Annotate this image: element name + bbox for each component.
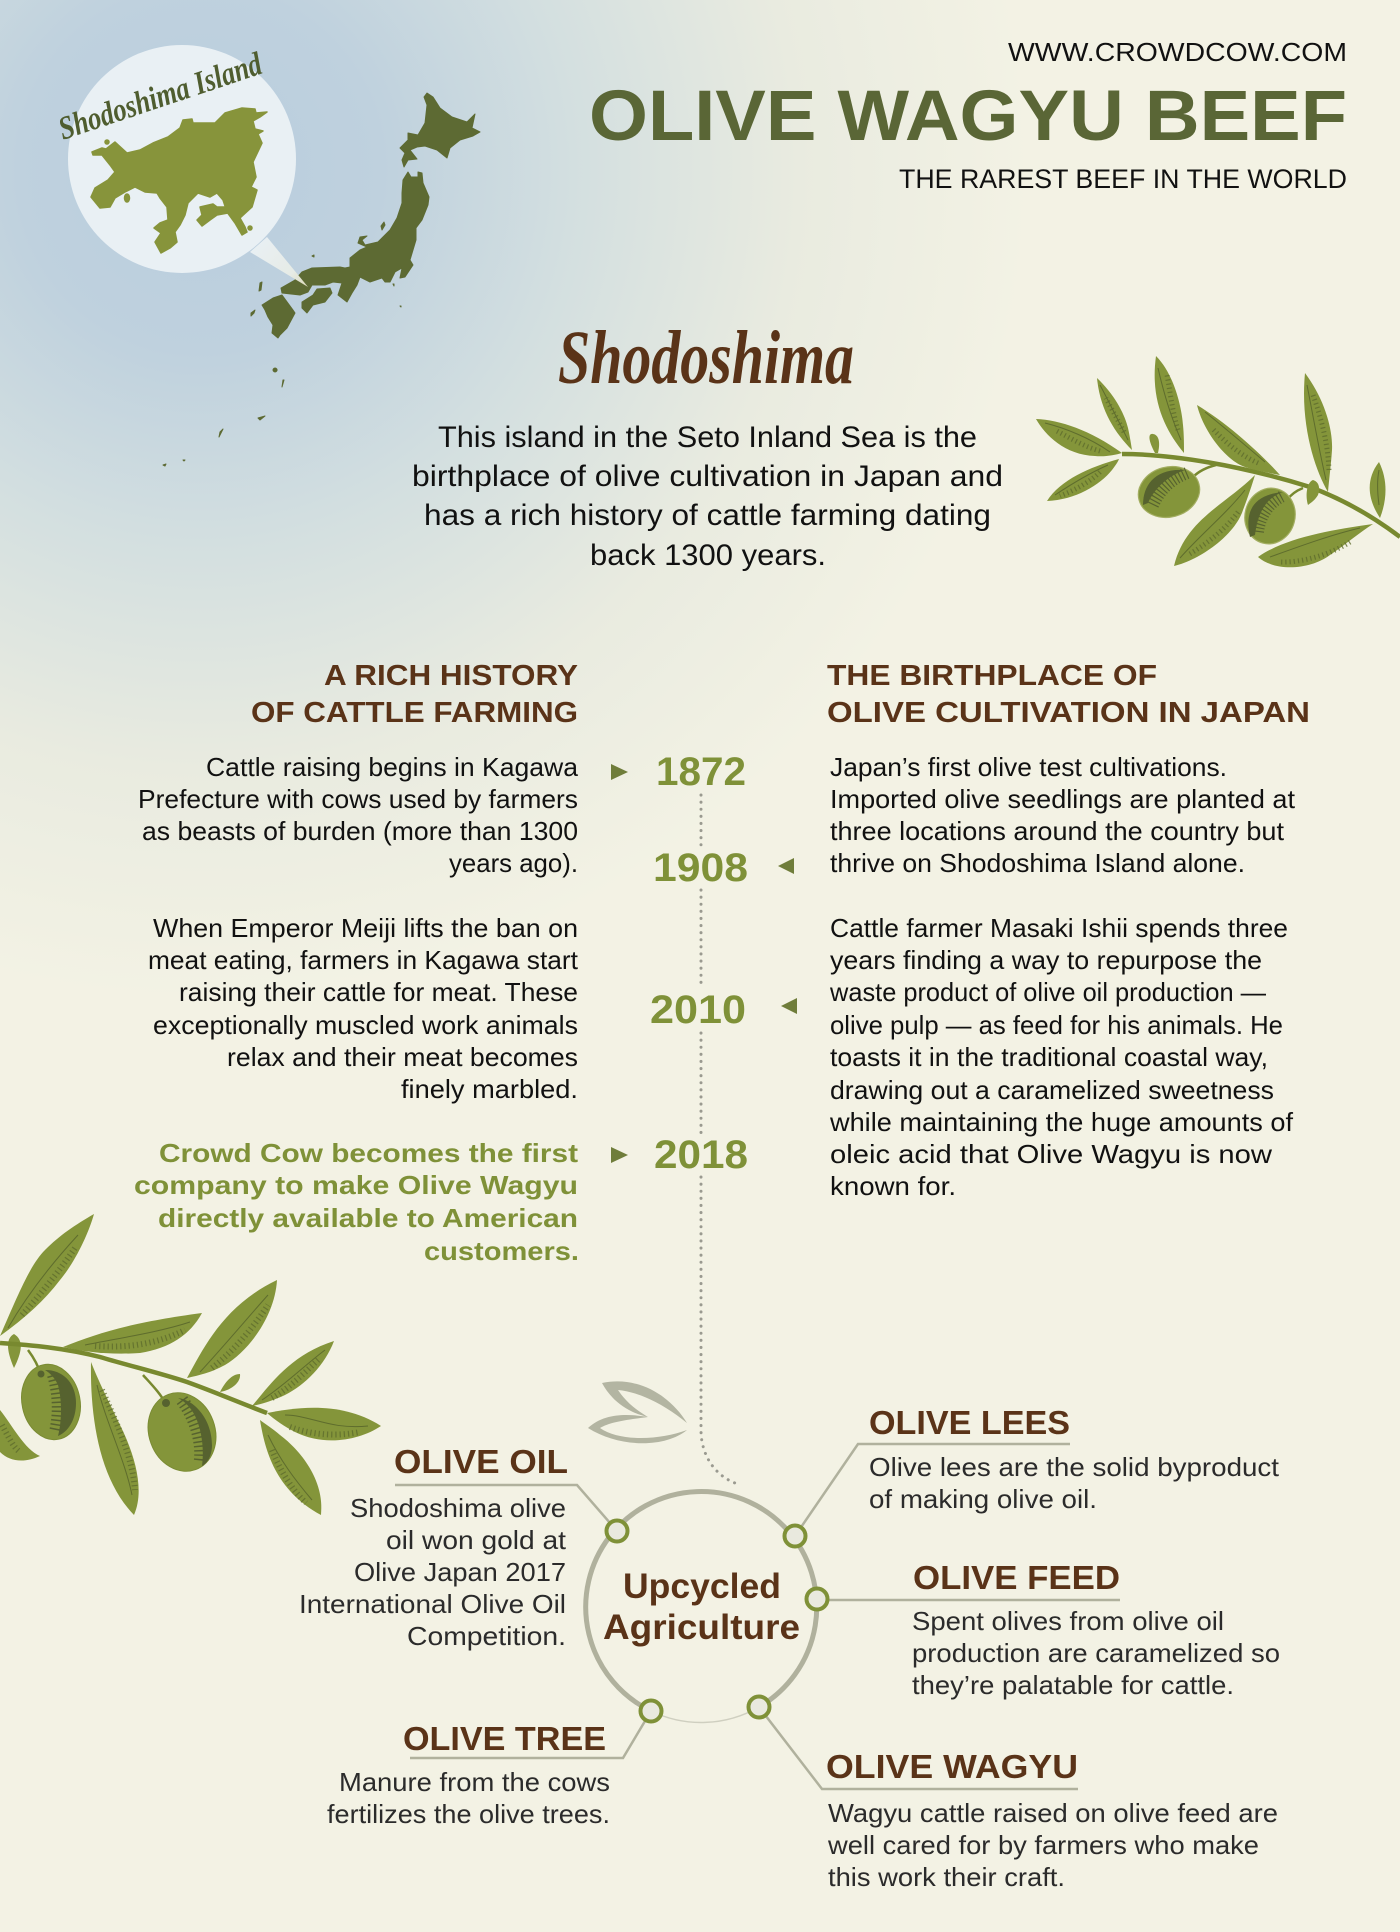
right text: Masaki Ishii: waste product of olive oil production — [829, 977, 1266, 1007]
centre label: Agriculture [603, 1608, 800, 1647]
right text: Masaki Ishii: drawing out a caramelized sweetness [830, 1075, 1274, 1105]
description: Olive Japan 2017 [354, 1557, 566, 1587]
year: 2018: 2018 [654, 1133, 748, 1177]
Kyushu [262, 295, 295, 338]
description: production are caramelized so [912, 1638, 1280, 1668]
left text: Emperor Meiji [148, 913, 579, 1104]
right text: Masaki Ishii: Cattle farmer Masaki Ishii spends three [830, 913, 1288, 943]
item: olive feed: OLIVE FEED [913, 1559, 1120, 1596]
item: olive lees [869, 1404, 1280, 1514]
subtitle: THE RAREST BEEF IN THE WORLD [899, 164, 1347, 194]
stalks [28, 1350, 166, 1404]
label: Shodoshima Island: Shodoshima Island [54, 46, 267, 148]
leaves [1036, 356, 1386, 567]
callout tail [250, 237, 308, 287]
arrow: 2018 [611, 1147, 628, 1163]
column heading: olive cultivation: THE BIRTHPLACE OF [827, 660, 1157, 692]
stem [1122, 454, 1400, 537]
olive [1239, 482, 1301, 550]
year: 2010: 2010 [650, 988, 746, 1032]
column heading: olive cultivation: OLIVE CULTIVATION IN JAPAN [827, 697, 1310, 729]
description: oil won gold at [386, 1525, 567, 1555]
map of Japan [163, 93, 480, 466]
right text: Masaki Ishii: toasts it in the traditional coastal way, [830, 1042, 1268, 1072]
stalks [1193, 465, 1303, 500]
description: Wagyu cattle raised on olive feed are [828, 1798, 1278, 1828]
year: 1872: 1872 [656, 750, 746, 794]
column heading: olive cultivation [827, 660, 1310, 729]
centre label [603, 1567, 800, 1647]
intro paragraph [412, 421, 1003, 572]
item: olive tree: OLIVE TREE [403, 1720, 606, 1757]
leaves [0, 1214, 381, 1515]
description [912, 1606, 1280, 1700]
intro paragraph: has a rich history of cattle farming dating [424, 499, 991, 532]
left text: Emperor Meiji: raising their cattle for meat. These [179, 977, 578, 1007]
callout: Shodoshima Island [54, 45, 308, 287]
description: Shodoshima olive [350, 1493, 566, 1523]
left text: Crowd Cow highlight: Crowd Cow becomes the first [159, 1138, 578, 1168]
right text: Masaki Ishii: known for. [830, 1171, 956, 1201]
intro paragraph: This island in the Seto Inland Sea is the [438, 421, 977, 454]
olive [137, 1383, 227, 1481]
description: this work their craft. [828, 1862, 1065, 1892]
right text: test cultivations [830, 752, 1296, 878]
description: Competition. [407, 1621, 566, 1651]
right text: Masaki Ishii: olive pulp — as feed for his animals. He [830, 1010, 1283, 1040]
connector lines [395, 1444, 1120, 1789]
item: olive wagyu: OLIVE WAGYU [826, 1748, 1078, 1785]
left text: Emperor Meiji: When Emperor Meiji lifts the ban on [153, 913, 578, 943]
description [827, 1798, 1278, 1892]
description: well cared for by farmers who make [827, 1830, 1259, 1860]
olive [15, 1359, 87, 1445]
Honshu [281, 172, 429, 302]
right text: test cultivations: thrive on Shodoshima Island alone. [830, 848, 1245, 878]
description: they’re palatable for cattle. [912, 1670, 1234, 1700]
callout circle [68, 45, 296, 273]
timeline dotted line [701, 795, 741, 1485]
description: Spent olives from olive oil [912, 1606, 1224, 1636]
column heading: cattle farming [251, 660, 578, 729]
centre label: Upcycled [623, 1567, 781, 1606]
item: olive lees: OLIVE LEES [869, 1404, 1070, 1441]
left text: 1872 entry: Cattle raising begins in Kagawa [206, 752, 579, 782]
Shikoku [302, 288, 332, 313]
description: Olive lees are the solid byproduct [869, 1452, 1280, 1482]
leaf veins [2, 1235, 368, 1503]
left text: Crowd Cow highlight: customers. [424, 1236, 579, 1266]
map of Shodoshima [91, 108, 267, 253]
item: olive tree [327, 1720, 610, 1829]
description: Manure from the cows [339, 1767, 610, 1797]
leaf veins [1045, 368, 1379, 562]
arrow: 2010 [781, 998, 797, 1014]
left text: Emperor Meiji: exceptionally muscled work animals [153, 1010, 578, 1040]
description [327, 1767, 610, 1829]
description [869, 1452, 1280, 1514]
right text: test cultivations: Imported olive seedlings are planted at [830, 784, 1296, 814]
right text: Masaki Ishii: while maintaining the huge amounts of [829, 1107, 1294, 1137]
ring [586, 1491, 817, 1722]
left text: Emperor Meiji: finely marbled. [401, 1074, 578, 1104]
nodes [606, 1520, 828, 1722]
item: olive wagyu [826, 1748, 1278, 1892]
title: OLIVE WAGYU BEEF [589, 77, 1347, 156]
description: fertilizes the olive trees. [327, 1799, 610, 1829]
description: of making olive oil. [869, 1484, 1097, 1514]
heading: Shodoshima: Shodoshima [558, 316, 854, 400]
right text: Masaki Ishii: oleic acid that Olive Wagyu is now [830, 1139, 1272, 1169]
year: 1908: 1908 [653, 846, 748, 890]
left text: Emperor Meiji: relax and their meat becomes [227, 1042, 578, 1072]
website: WWW.CROWDCOW.COM [1008, 37, 1347, 67]
upcycled agriculture diagram [395, 1381, 1120, 1789]
column heading: cattle farming: A RICH HISTORY [324, 660, 578, 692]
description: International Olive Oil [299, 1589, 566, 1619]
left text: 1872 entry: Prefecture with cows used by farmers [138, 784, 578, 814]
left text: 1872 entry: as beasts of burden (more than 1300 [142, 816, 578, 846]
intro paragraph: birthplace of olive cultivation in Japan and [412, 460, 1003, 493]
right text: Masaki Ishii: years finding a way to repurpose the [830, 945, 1262, 975]
arrow: 1872 [611, 764, 628, 780]
item: olive oil: OLIVE OIL [394, 1443, 568, 1480]
header [589, 37, 1347, 194]
column heading: cattle farming: OF CATTLE FARMING [251, 697, 578, 729]
left text: 1872 entry: years ago). [449, 848, 578, 878]
left text: 1872 entry [138, 752, 579, 878]
right text: Masaki Ishii [829, 913, 1294, 1201]
icon: small leaf [588, 1381, 687, 1443]
description [299, 1493, 567, 1651]
olive [1133, 460, 1205, 524]
stem [0, 1343, 267, 1413]
left text: Crowd Cow highlight: company to make Olive Wagyu [134, 1170, 578, 1200]
sky gradient [0, 0, 1400, 1000]
arrow: 1908 [778, 858, 794, 874]
right text: test cultivations: three locations around the country but [830, 816, 1285, 846]
left text: Crowd Cow highlight: directly available to American [158, 1203, 578, 1233]
right text: test cultivations: Japan’s first olive test cultivations. [830, 752, 1227, 782]
outlying islands [163, 222, 401, 466]
intro paragraph: back 1300 years. [590, 539, 826, 572]
left text: Emperor Meiji: meat eating, farmers in Kagawa start [148, 945, 579, 975]
olive branch: top right [1036, 356, 1400, 567]
item: olive oil [299, 1443, 568, 1651]
olive branch: lower left [0, 1214, 381, 1515]
item: olive feed [912, 1559, 1280, 1700]
Hokkaido [400, 93, 480, 167]
left text: Crowd Cow highlight [134, 1138, 579, 1266]
